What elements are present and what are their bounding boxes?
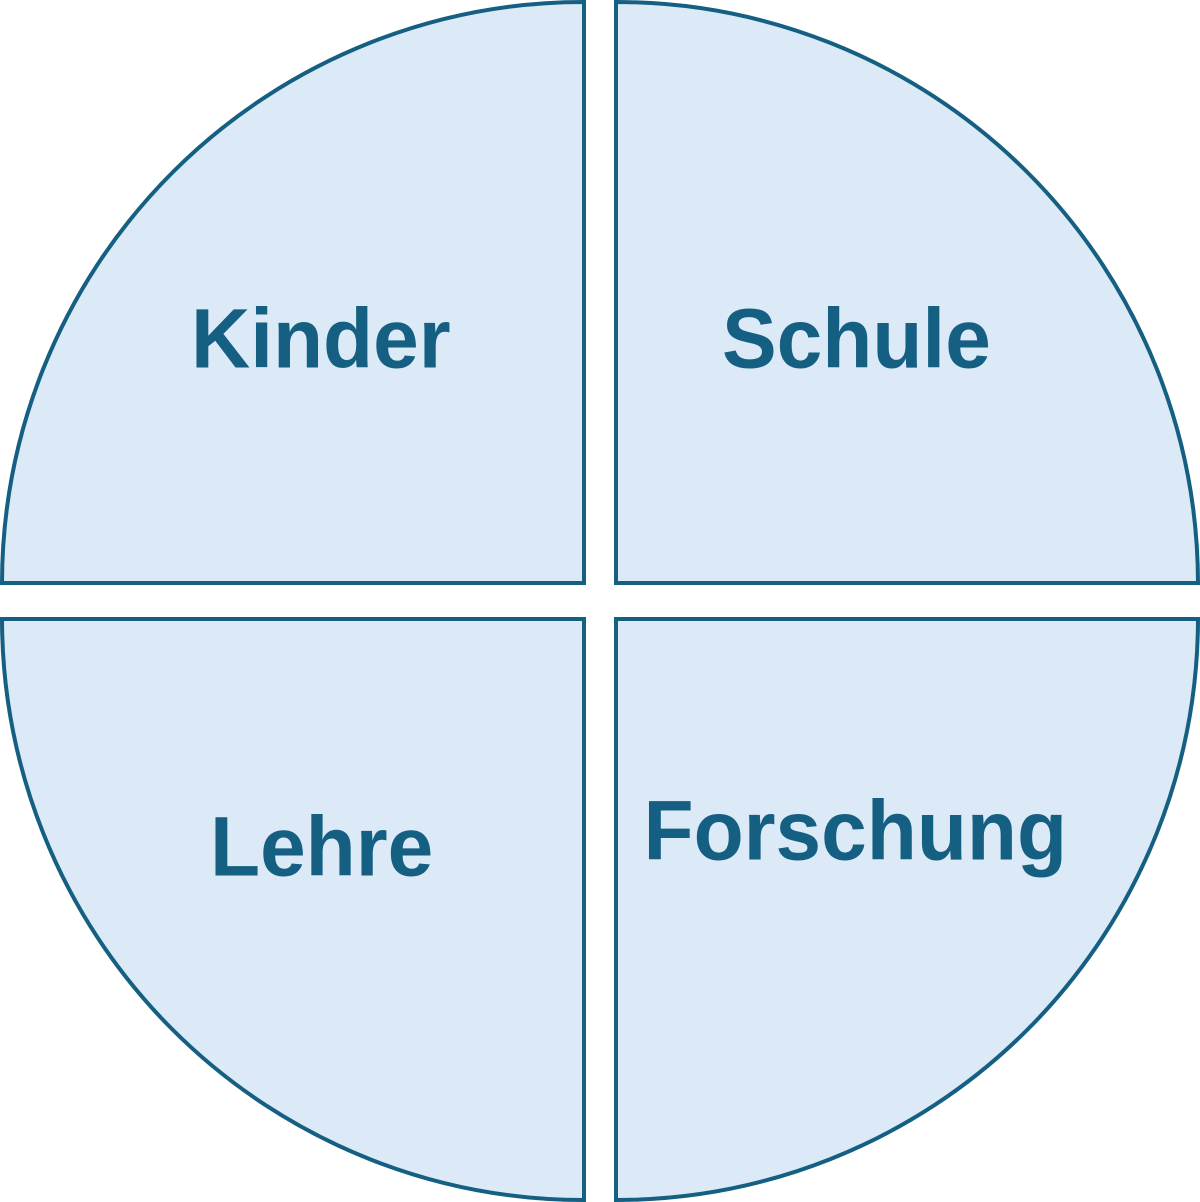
label: Forschung: Forschung: [644, 783, 1067, 878]
panel: Schule: [616, 2, 1198, 583]
panel: Lehre: [2, 619, 584, 1200]
panel: Forschung: [616, 619, 1198, 1200]
label: Kinder: Kinder: [191, 291, 451, 386]
panel: Kinder: [2, 2, 584, 583]
label: Lehre: Lehre: [210, 799, 433, 894]
label: Schule: Schule: [722, 291, 991, 386]
